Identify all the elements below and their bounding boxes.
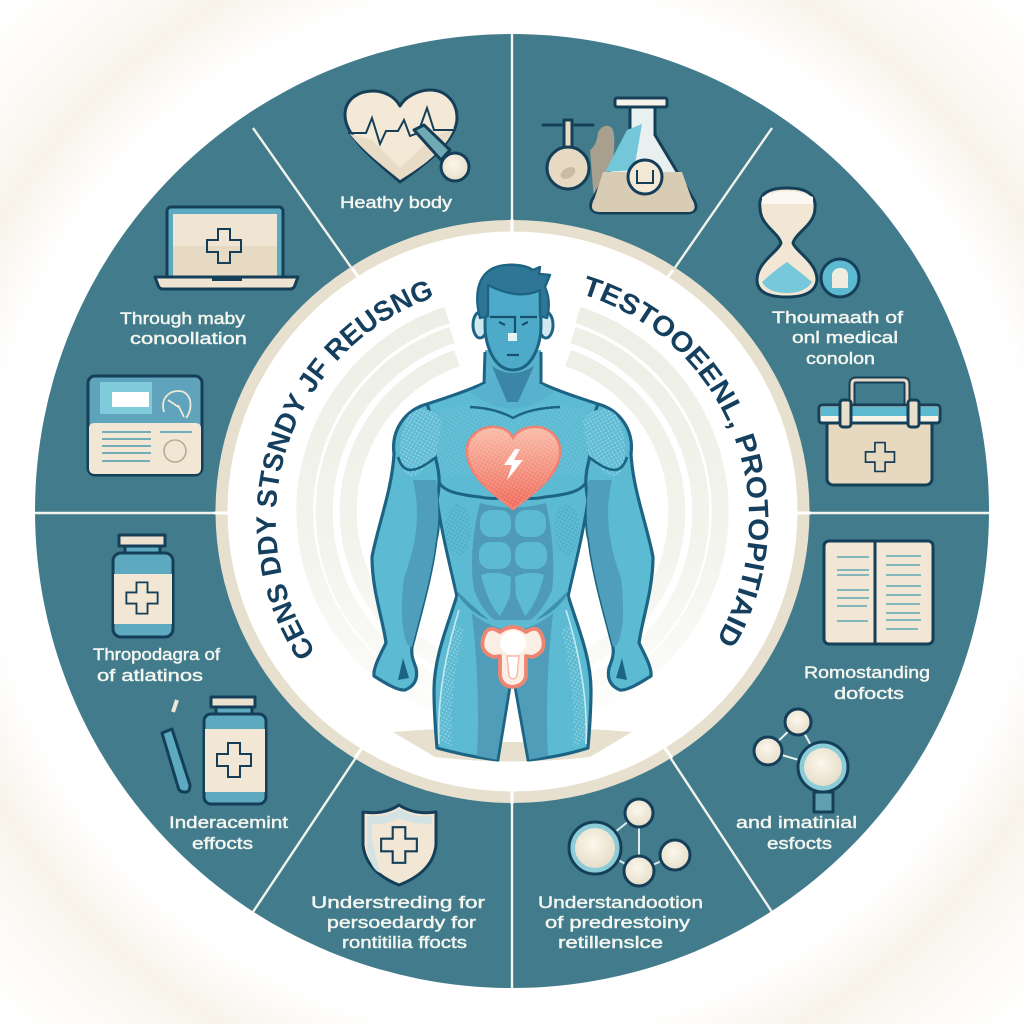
- facial features: [490, 317, 537, 355]
- icon: test tube: [162, 700, 190, 792]
- label: Understandootion: [538, 893, 703, 912]
- label: Romostanding: [804, 663, 930, 682]
- panel: hourglass: onl medical: [792, 328, 898, 347]
- panel: laptop and record card: [88, 207, 298, 475]
- left arm: [372, 404, 442, 690]
- panel: molecule: [538, 799, 703, 952]
- panel: medical case: [819, 380, 940, 485]
- panel: book: [804, 541, 933, 703]
- heart on chest: [467, 427, 560, 509]
- human figure: [372, 265, 653, 760]
- inner ring and centre disc: [214, 219, 811, 804]
- reproductive organ: [482, 627, 544, 687]
- panel: flask: [543, 98, 696, 213]
- panel: hourglass: [757, 188, 903, 368]
- icon: molecule: [569, 799, 690, 886]
- icon: shield with cross: [363, 805, 436, 885]
- panel: bottle and test tube: effocts: [192, 834, 253, 853]
- icon: laptop: [155, 207, 298, 289]
- concentric background arcs: [305, 315, 720, 703]
- label: Understreding for: [311, 893, 485, 912]
- legs: [434, 595, 591, 760]
- panel: shield: rontitilia ffocts: [342, 933, 467, 952]
- icon: hourglass: [757, 188, 859, 297]
- icon: record card: [88, 376, 202, 475]
- neck: [470, 350, 555, 408]
- label: and imatinial: [736, 813, 857, 832]
- icon: laboratory flasks: [543, 98, 696, 213]
- floor band: [393, 727, 632, 762]
- curved title: left: CENS DDY STSNDY JF REUSNG: [256, 282, 432, 658]
- panel: book: dofocts: [834, 684, 904, 703]
- label: Thropodagra of: [93, 645, 220, 664]
- right arm: [583, 404, 653, 690]
- icon: heart with ECG and syringe: [345, 90, 469, 182]
- chest muscles: [436, 405, 590, 476]
- abs: [479, 510, 547, 616]
- icon: bottle: [204, 697, 266, 804]
- panel: upper bottle: [93, 535, 220, 685]
- panel: laptop and record card: conoollation: [130, 329, 247, 348]
- icon: bottle: [113, 535, 173, 637]
- panel: hourglass: conolon: [806, 349, 875, 368]
- panel: molecule: retillenslce: [558, 933, 663, 952]
- ears: [473, 312, 487, 338]
- panel: upper bottle: of atlatinos: [97, 666, 203, 685]
- label: Inderacemint: [169, 813, 288, 832]
- curved title: right: TESTOOEENL, PROTOPITIAID: [586, 276, 768, 646]
- icon: open book: [824, 541, 933, 644]
- panel: molecule: of predrestoiny: [545, 913, 691, 932]
- panel: magnifier molecule: [736, 709, 857, 853]
- hair: [477, 265, 550, 318]
- icon: molecule with magnifier: [754, 709, 848, 812]
- panel: bottle and test tube: [162, 697, 288, 853]
- panel: shield: [311, 805, 485, 952]
- lower abdominal lines: [456, 590, 569, 620]
- face: [485, 285, 541, 370]
- panel: healthy body: [340, 90, 469, 212]
- panel: shield: persoedardy for: [327, 913, 476, 932]
- panel: magnifier molecule: esfocts: [767, 834, 832, 853]
- torso: [427, 383, 598, 630]
- icon: first aid case: [819, 380, 940, 485]
- label: Through maby: [120, 309, 246, 328]
- label: Heathy body: [340, 193, 453, 212]
- abdominal shading: [472, 503, 553, 620]
- label: Thoumaath of: [772, 308, 903, 327]
